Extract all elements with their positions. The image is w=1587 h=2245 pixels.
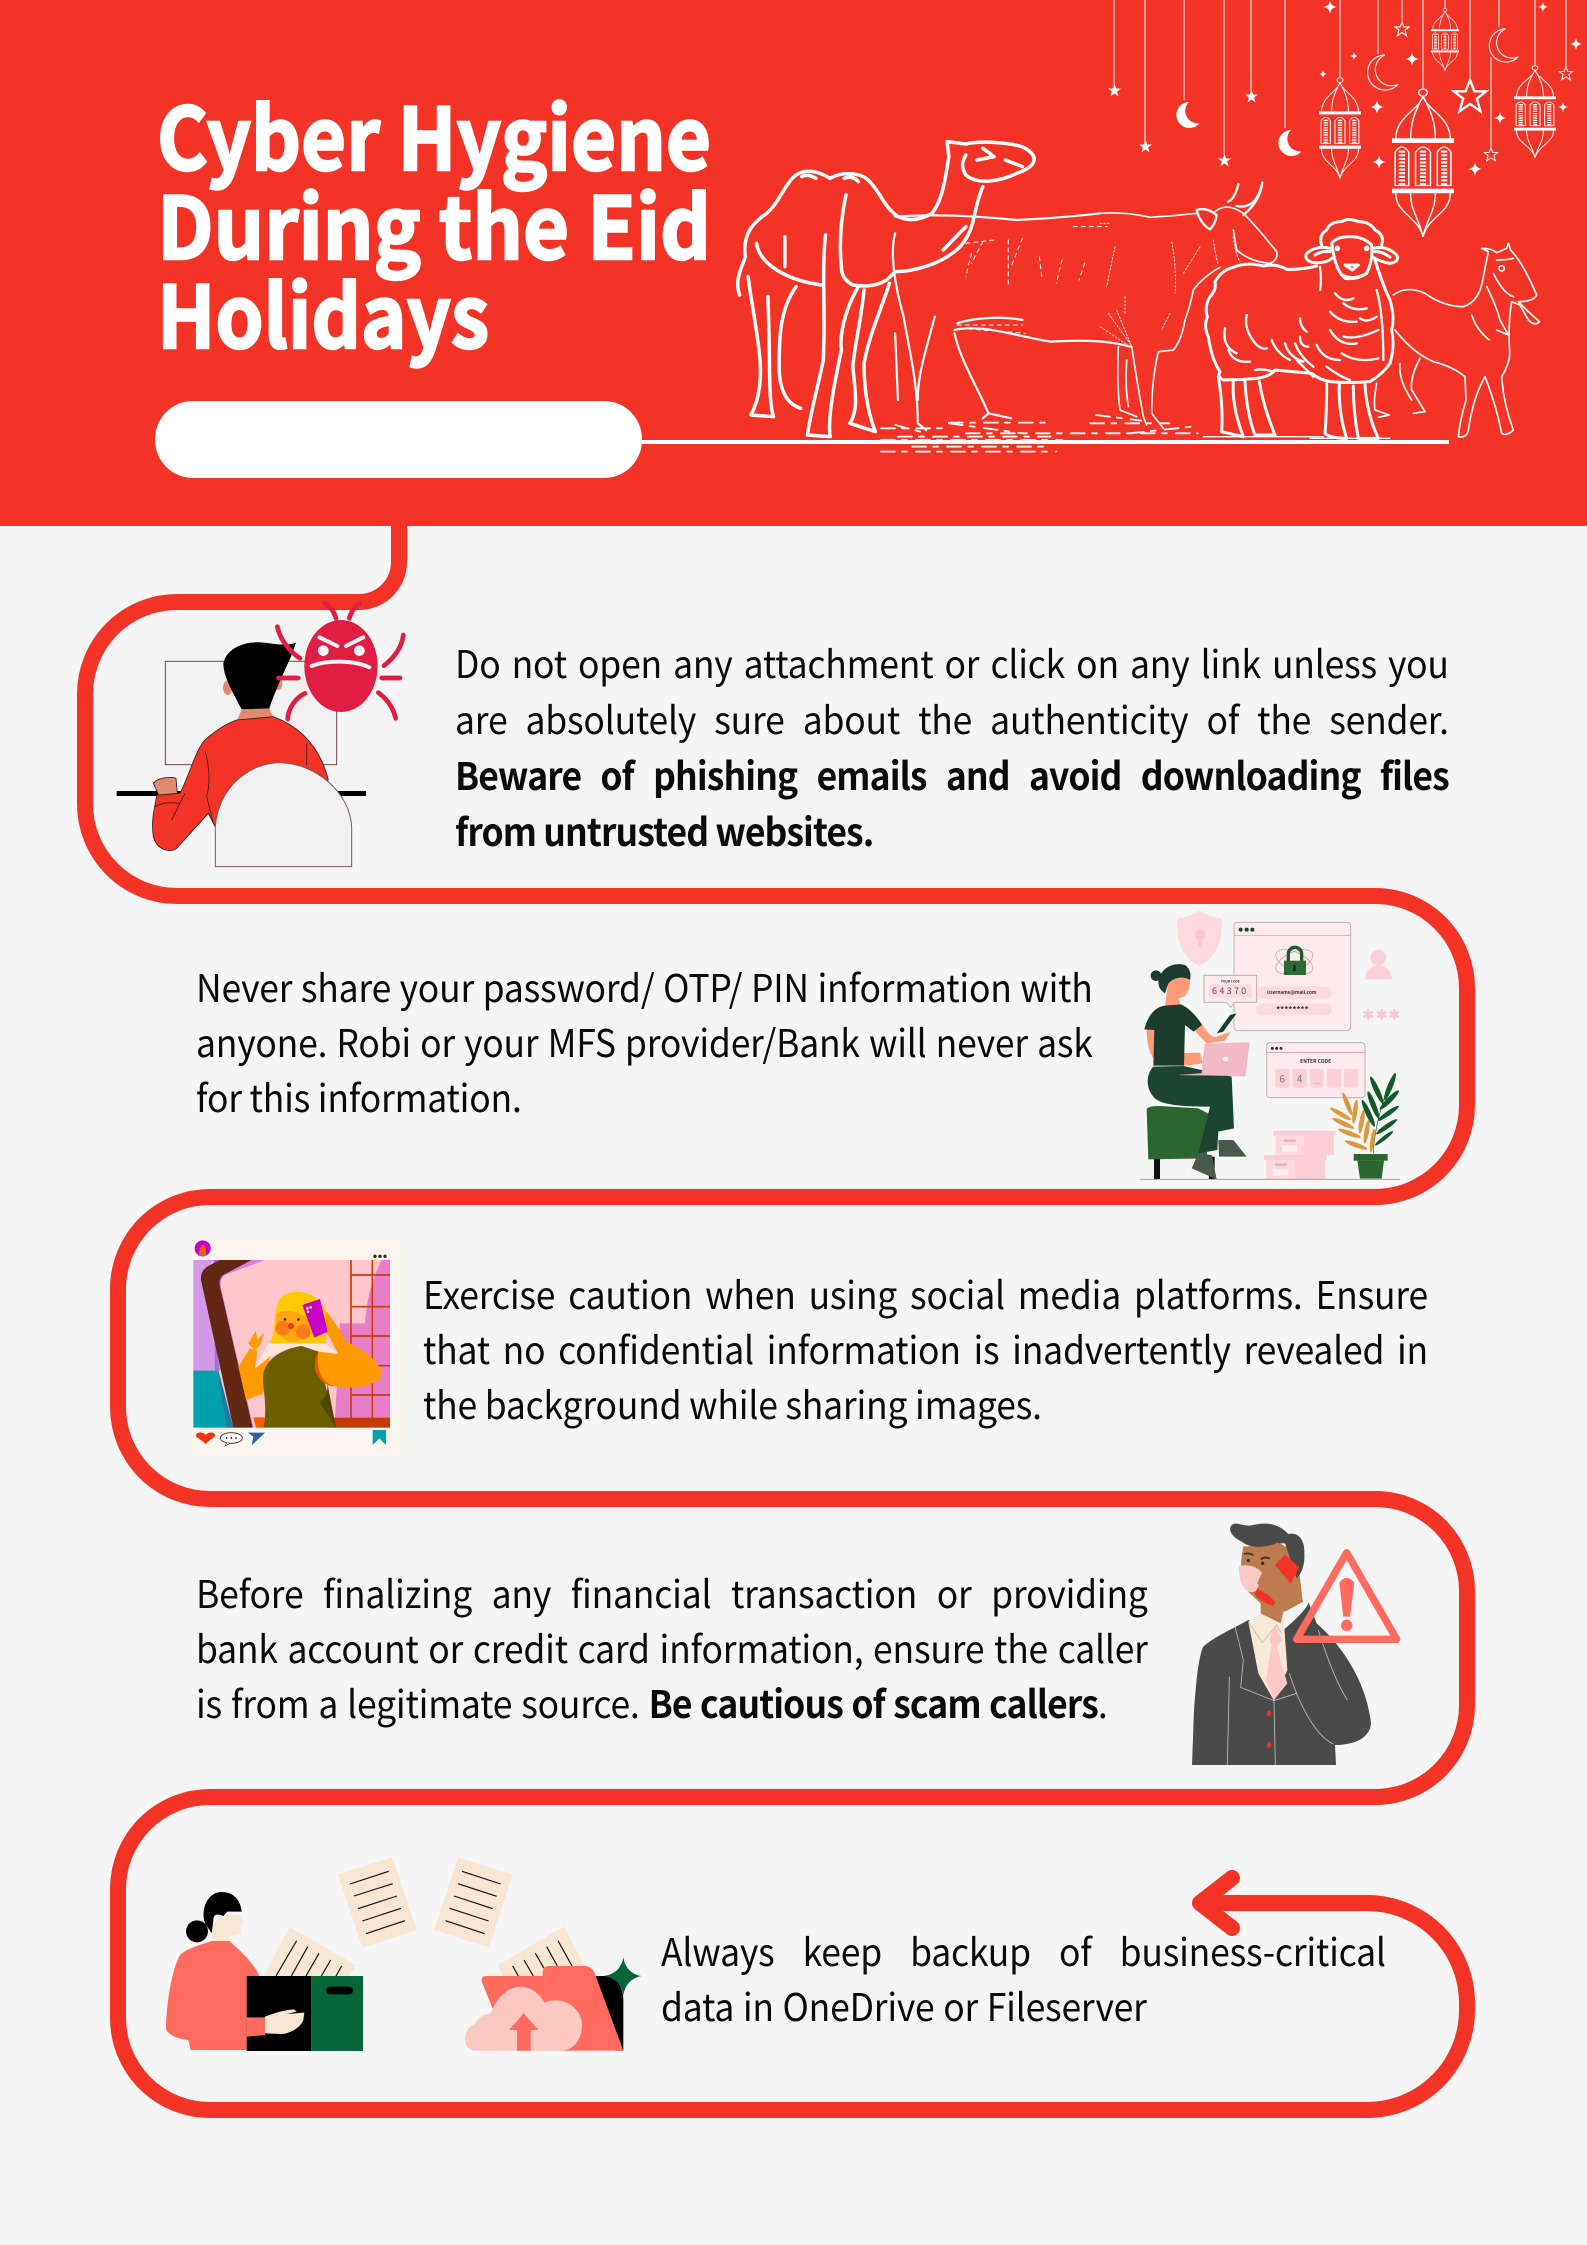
asterisks bbox=[1364, 1009, 1399, 1020]
grass bbox=[881, 415, 1198, 452]
buttons bbox=[1267, 1710, 1271, 1748]
title: Cyber Hygiene bbox=[157, 70, 711, 195]
enter code window: ENTER CODE bbox=[1300, 1058, 1331, 1065]
warning triangle bbox=[1297, 1553, 1397, 1639]
header white pill bbox=[155, 401, 642, 478]
plant bbox=[1329, 1072, 1401, 1179]
header rule line bbox=[642, 440, 1449, 444]
text block 4: is from a legitimate source. Be cautious of scam callers. bbox=[196, 1674, 1108, 1729]
text block 1: Beware of phishing emails and avoid downloading files bbox=[455, 746, 1449, 801]
menu dots bbox=[373, 1255, 387, 1258]
share arrow bbox=[248, 1433, 265, 1445]
text block 3 bbox=[423, 1265, 1428, 1430]
enter code window: 6 bbox=[1280, 1070, 1286, 1085]
enter code window: 4 bbox=[1297, 1070, 1303, 1085]
flying page right bbox=[434, 1857, 513, 1948]
sparkle bbox=[604, 1957, 641, 1995]
suit details bbox=[1227, 1622, 1347, 1765]
cow head and legs bbox=[1100, 183, 1277, 428]
post card bbox=[188, 1238, 403, 1457]
line-art animals: camel and cow body bbox=[738, 142, 1198, 452]
hanging Eid decorations bbox=[1108, 0, 1582, 237]
code bubble bbox=[1204, 975, 1257, 1007]
man bbox=[152, 642, 328, 851]
icon: backup to cloud folder bbox=[166, 1857, 641, 2051]
title: During the Eid bbox=[157, 159, 711, 284]
chair bbox=[215, 763, 352, 867]
cloud bbox=[465, 1987, 582, 2051]
title bbox=[157, 70, 711, 373]
bookmark bbox=[373, 1430, 386, 1445]
text block 3: the background while sharing images. bbox=[423, 1375, 1042, 1430]
selfie photo bbox=[193, 1260, 390, 1428]
goat bbox=[1374, 243, 1539, 437]
text block 2: Never share your password/ OTP/ PIN information with bbox=[196, 958, 1093, 1013]
hand bbox=[1257, 1563, 1303, 1612]
stool bbox=[1147, 1106, 1215, 1179]
comment bubble bbox=[220, 1433, 242, 1446]
upload arrow bbox=[509, 2013, 538, 2051]
code bubble: YOUR CODE bbox=[1220, 978, 1240, 983]
line-art animals: cow head, sheep and goat bbox=[1100, 183, 1539, 438]
flying page left bbox=[338, 1857, 417, 1948]
shirt and tie bbox=[1248, 1613, 1287, 1701]
virus bug bbox=[277, 603, 403, 719]
title: Holidays bbox=[157, 248, 489, 373]
text block 4: Before finalizing any financial transaction or providing bbox=[196, 1564, 1148, 1619]
suit bbox=[1192, 1602, 1371, 1765]
text block 1 bbox=[455, 634, 1449, 857]
icon: social media selfie post bbox=[188, 1238, 403, 1457]
login window: ******** bbox=[1276, 1005, 1309, 1016]
text block 4 bbox=[196, 1564, 1148, 1729]
header band bbox=[0, 0, 1587, 526]
woman bbox=[166, 1892, 259, 2050]
arm bbox=[247, 2017, 265, 2037]
login window: Username@mail.com bbox=[1267, 989, 1317, 996]
text block 5: Always keep backup of business-critical bbox=[661, 1922, 1386, 1977]
text block 2 bbox=[196, 958, 1093, 1123]
login window bbox=[1234, 922, 1351, 1031]
enter code window bbox=[1267, 1043, 1365, 1098]
text block 5: data in OneDrive or Fileserver bbox=[661, 1977, 1147, 2032]
paper in box bbox=[258, 1927, 356, 1987]
woman bbox=[1144, 964, 1249, 1179]
sheep bbox=[1203, 219, 1397, 438]
text block 4: bank account or credit card information, ensure the caller bbox=[196, 1619, 1148, 1674]
text block 5 bbox=[661, 1922, 1386, 2032]
paper in folder bbox=[497, 1927, 587, 1987]
person icon bbox=[1365, 950, 1392, 979]
cow body bbox=[893, 213, 1130, 430]
icon: businessman on phone with warning sign bbox=[1192, 1524, 1397, 1765]
text block 1: Do not open any attachment or click on any link unless you bbox=[455, 634, 1449, 689]
heart bbox=[196, 1432, 215, 1444]
text block 3: Exercise caution when using social media platforms. Ensure bbox=[423, 1265, 1428, 1320]
text block 1: from untrusted websites. bbox=[455, 802, 873, 857]
text block 2: for this information. bbox=[196, 1068, 522, 1123]
connecting arrow path bbox=[85, 526, 1467, 2110]
icon: man at computer with virus bug bbox=[117, 603, 403, 867]
arrowhead bbox=[1200, 1878, 1232, 1928]
camel bbox=[738, 142, 1034, 437]
box bbox=[247, 1976, 363, 2051]
hand bbox=[265, 2009, 304, 2034]
folder bbox=[482, 1966, 623, 2051]
text block 2: anyone. Robi or your MFS provider/Bank will never ask bbox=[196, 1013, 1093, 1068]
shield bbox=[1177, 911, 1222, 966]
code bubble: 64370 bbox=[1212, 984, 1249, 997]
phone lower bbox=[1255, 1588, 1277, 1606]
ground line bbox=[1140, 1178, 1400, 1181]
icon: woman with secure login screens bbox=[1140, 911, 1401, 1179]
avatar bbox=[195, 1240, 211, 1256]
phone upper bbox=[1275, 1554, 1299, 1583]
desk bbox=[117, 791, 366, 796]
head bbox=[1230, 1524, 1304, 1623]
boxes bbox=[1264, 1131, 1336, 1179]
text block 3: that no confidential information is inadvertently revealed in bbox=[423, 1320, 1428, 1375]
folder back bbox=[595, 1976, 623, 2051]
monitor bbox=[165, 661, 337, 765]
text block 1: are absolutely sure about the authenticity of the sender. bbox=[455, 690, 1449, 745]
